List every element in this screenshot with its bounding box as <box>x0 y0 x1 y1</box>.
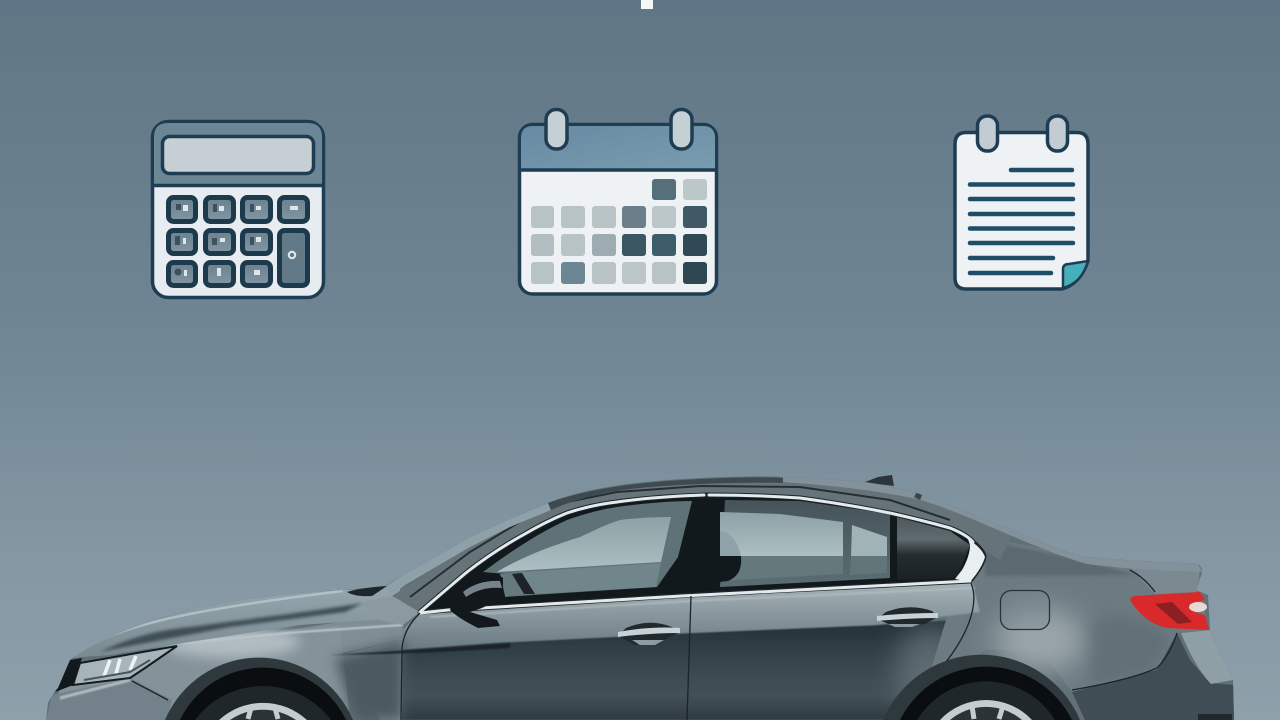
car window chrome <box>420 495 973 613</box>
car antenna fin <box>865 475 894 486</box>
car spoiler side <box>1130 568 1200 594</box>
car door seams <box>132 570 1177 720</box>
car mirror <box>450 574 503 628</box>
car rear bumper <box>1072 633 1234 720</box>
car rear glass <box>720 500 890 587</box>
icon: notepad <box>955 116 1088 289</box>
car front handle <box>618 623 680 645</box>
notepad folded corner <box>1063 261 1088 288</box>
car fuel door <box>1000 590 1050 630</box>
car lower doors <box>400 618 985 720</box>
car rear reflector <box>1198 714 1232 720</box>
notepad text lines <box>970 170 1073 273</box>
car rear quarter <box>932 542 1206 692</box>
car front wheel <box>165 658 353 720</box>
car A-pillar strip <box>383 503 551 595</box>
car rear wheel <box>883 655 1080 720</box>
car C-pillar chrome wedge <box>955 539 985 582</box>
car rear handle <box>877 607 938 627</box>
car body <box>40 470 1240 720</box>
car roof strip <box>548 477 783 510</box>
car shoulder band <box>400 582 980 650</box>
notepad ring left <box>978 116 998 151</box>
car headlight <box>73 646 177 685</box>
car front fender <box>274 620 403 720</box>
top white mark <box>641 0 653 9</box>
calendar day grid <box>531 179 707 284</box>
calendar ring right <box>671 110 692 149</box>
calendar ring left <box>546 110 567 149</box>
car tail light <box>1130 592 1209 630</box>
notepad ring right <box>1048 116 1068 151</box>
icon: calculator <box>152 122 324 298</box>
car roof panel <box>392 542 1006 601</box>
car wiper <box>347 586 387 596</box>
car hood <box>70 588 403 658</box>
car bumper <box>46 678 172 720</box>
car window surround <box>420 495 984 612</box>
icon: calendar <box>520 110 716 294</box>
car front glass <box>483 501 692 597</box>
car quarter glass <box>897 517 970 580</box>
car <box>40 470 1240 720</box>
